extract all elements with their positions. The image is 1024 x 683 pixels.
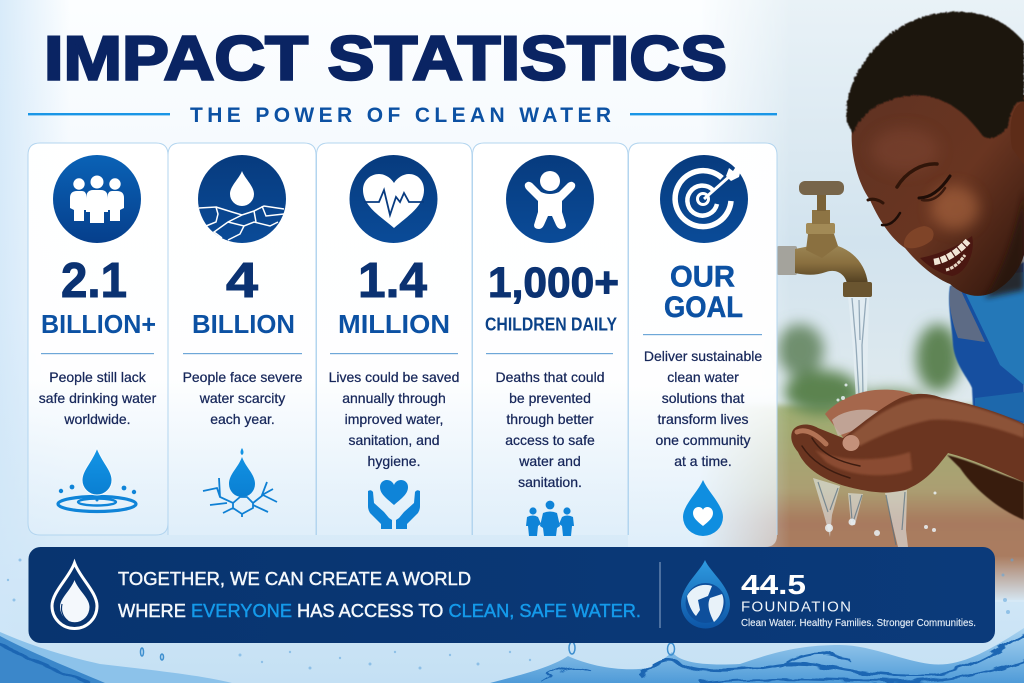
- water stream: [848, 296, 869, 400]
- goal heading: GOAL: [664, 291, 743, 324]
- icon: hands holding heart: [368, 480, 420, 529]
- dark water ripples: [0, 635, 1024, 683]
- icon: drop with heart: [683, 480, 723, 536]
- description: [39, 369, 157, 427]
- description: [496, 369, 604, 490]
- forehead highlight: [871, 128, 939, 172]
- banner: call to action: [28, 547, 995, 643]
- description: clean water: [667, 369, 739, 385]
- hand highlights: [850, 398, 1024, 446]
- description: solutions that: [662, 390, 744, 406]
- description: Deliver sustainable: [644, 348, 762, 364]
- description: sanitation, and: [348, 432, 440, 448]
- description: transform lives: [657, 411, 749, 427]
- description: [644, 348, 762, 469]
- back hand: [825, 390, 914, 440]
- boy's shirt: [949, 262, 1024, 424]
- panel: 4 billion: [168, 143, 316, 535]
- description: Lives could be saved: [329, 369, 459, 385]
- description: improved water,: [345, 411, 443, 427]
- description: water and: [518, 453, 581, 469]
- description: each year.: [210, 411, 275, 427]
- icon: drop on cracked ground: [203, 448, 277, 517]
- description: annually through: [342, 390, 446, 406]
- description: People face severe: [183, 369, 303, 385]
- palm water: [832, 410, 880, 436]
- icon: water drop with ripples: [58, 448, 136, 512]
- stat unit: MILLION: [338, 309, 450, 339]
- icon: child with raised arms: [506, 155, 594, 243]
- description: through better: [506, 411, 594, 427]
- panel: 1,000+ children daily: [472, 143, 628, 536]
- cupped hands and arm: [791, 390, 1024, 493]
- front hand and forearm: [791, 394, 1024, 493]
- photo backdrop: [690, 0, 1024, 605]
- stat number: 4: [226, 254, 258, 308]
- water droplets: [140, 642, 674, 660]
- boy's smile: [920, 236, 973, 276]
- logo name: 44.5: [741, 569, 806, 600]
- stat unit: BILLION: [192, 309, 295, 339]
- boy's head: [852, 80, 1024, 296]
- description: worldwide.: [63, 411, 131, 427]
- stat number: 1,000+: [488, 259, 619, 307]
- description: access to safe: [505, 432, 595, 448]
- description: water scarcity: [199, 390, 285, 406]
- description: People still lack: [49, 369, 147, 385]
- description: be prevented: [509, 390, 591, 406]
- icon: family: [526, 501, 574, 536]
- stat number: 2.1: [61, 254, 127, 308]
- icon: heart with pulse: [350, 155, 438, 243]
- photo: child drinking from a tap: [690, 0, 1024, 605]
- boy's lower arm: [947, 455, 1024, 520]
- description: [183, 369, 303, 427]
- stat unit: CHILDREN DAILY: [485, 314, 618, 334]
- water waves: [0, 558, 1024, 683]
- description: hygiene.: [368, 453, 420, 469]
- description: at a time.: [674, 453, 732, 469]
- photo fade into water: [770, 556, 1024, 602]
- description: [329, 369, 459, 469]
- subtitle with rules: THE POWER OF CLEAN WATER: [190, 104, 611, 127]
- description: safe drinking water: [39, 390, 157, 406]
- tap: [777, 181, 872, 297]
- title: IMPACT STATISTICS: [44, 24, 727, 94]
- neck shadow: [985, 190, 1024, 298]
- stat number: 1.4: [358, 254, 427, 308]
- goal heading: OUR: [670, 260, 735, 294]
- boy's hair: [846, 12, 1024, 138]
- icon: white water drop: [52, 563, 97, 628]
- banner message: TOGETHER, WE CAN CREATE A WORLD: [118, 568, 471, 589]
- thumb tip: [842, 435, 860, 451]
- goal heading: [664, 260, 743, 324]
- banner message: WHERE EVERYONE HAS ACCESS TO CLEAN, SAFE WATER.: [118, 600, 641, 621]
- description: Deaths that could: [496, 369, 604, 385]
- panel: our goal: [628, 143, 777, 547]
- shirt pattern: [950, 272, 1024, 422]
- logo: globe in water drop: [681, 560, 730, 628]
- panel: 2.1 billion: [28, 143, 168, 535]
- water falling from hands: [813, 384, 936, 547]
- banner message: [118, 568, 641, 621]
- icon: target with arrow: [660, 155, 748, 243]
- logo subtitle: FOUNDATION: [741, 598, 851, 616]
- stat unit: BILLION+: [41, 309, 156, 339]
- boy's eyes and brows: [868, 164, 950, 225]
- cheek highlight: [931, 186, 979, 230]
- icon: group of people: [53, 155, 141, 243]
- boy's nose: [904, 226, 934, 248]
- description: sanitation.: [518, 474, 582, 490]
- icon: drop over cracked earth: [198, 155, 286, 243]
- boy's ear: [1010, 102, 1024, 165]
- fingers: [797, 431, 860, 478]
- panel: 1.4 million: [316, 143, 472, 535]
- tagline: Clean Water. Healthy Families. Stronger Communities.: [741, 617, 976, 629]
- description: one community: [656, 432, 750, 448]
